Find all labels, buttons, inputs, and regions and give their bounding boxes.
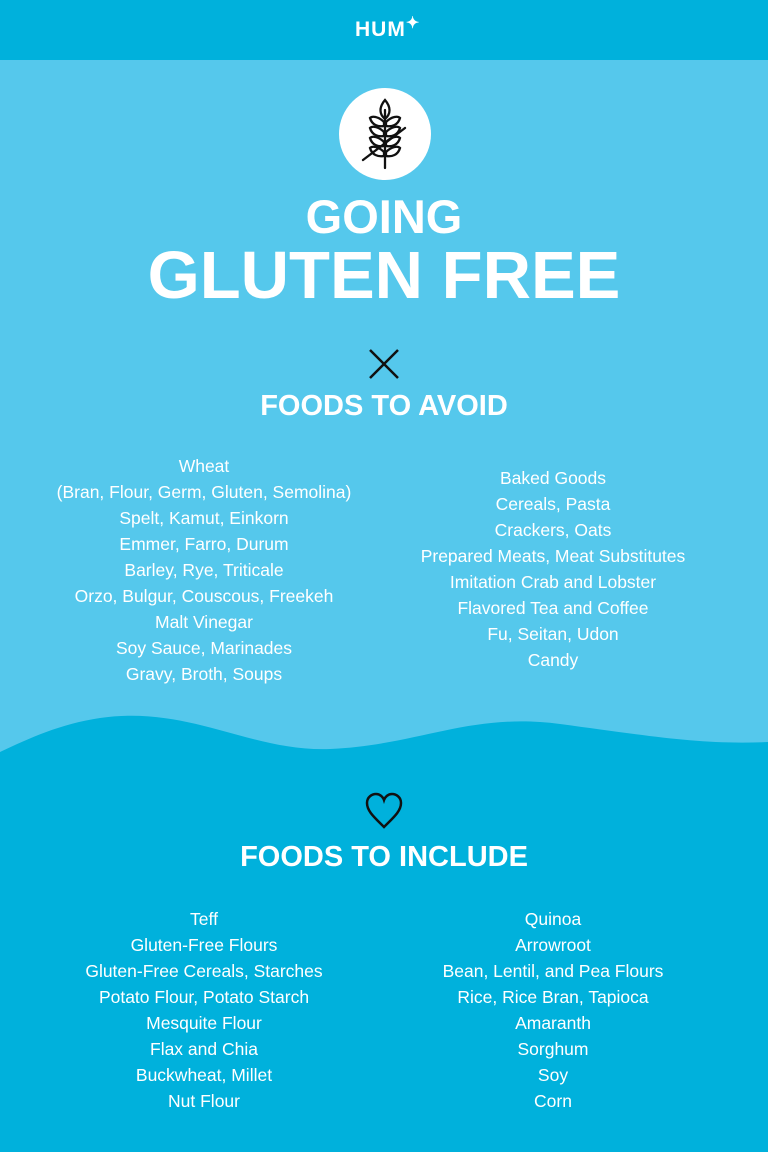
avoid list left: Orzo, Bulgur, Couscous, Freekeh	[75, 586, 333, 606]
heading: foods to include: FOODS TO INCLUDE	[240, 841, 528, 873]
avoid list right: Flavored Tea and Coffee	[457, 598, 648, 618]
include list right: Amaranth	[515, 1013, 591, 1033]
avoid list right: Crackers, Oats	[495, 520, 611, 540]
avoid list left: Malt Vinegar	[155, 612, 253, 632]
include list right	[443, 909, 663, 1111]
avoid list right: Fu, Seitan, Udon	[487, 624, 619, 644]
light background with wave	[0, 60, 768, 752]
include list right: Quinoa	[525, 909, 581, 929]
avoid list left: Soy Sauce, Marinades	[116, 638, 292, 658]
avoid list right: Baked Goods	[500, 468, 606, 488]
avoid list right	[421, 468, 685, 670]
text: GLUTEN FREE	[148, 238, 620, 313]
include list left: Flax and Chia	[150, 1039, 258, 1059]
icon: crossed wheat	[339, 88, 431, 180]
heading: foods to avoid: FOODS TO AVOID	[260, 390, 508, 422]
avoid list left: Barley, Rye, Triticale	[124, 560, 284, 580]
avoid list left: (Bran, Flour, Germ, Gluten, Semolina)	[57, 482, 351, 502]
avoid list left: Wheat	[179, 456, 229, 476]
include list right: Bean, Lentil, and Pea Flours	[443, 961, 663, 981]
include list right: Soy	[538, 1065, 568, 1085]
title: GOING	[306, 190, 462, 243]
include list left: Teff	[190, 909, 218, 929]
avoid list right: Imitation Crab and Lobster	[450, 572, 656, 592]
avoid list right: Candy	[528, 650, 578, 670]
include list left: Mesquite Flour	[146, 1013, 262, 1033]
avoid list left	[57, 456, 351, 684]
avoid list left: Emmer, Farro, Durum	[119, 534, 289, 554]
include list left: Gluten-Free Cereals, Starches	[85, 961, 323, 981]
top bar	[0, 0, 768, 60]
icon: X	[369, 349, 399, 379]
avoid list left: Spelt, Kamut, Einkorn	[119, 508, 289, 528]
include list right: Arrowroot	[515, 935, 591, 955]
avoid list right: Prepared Meats, Meat Substitutes	[421, 546, 685, 566]
logo: HUM✦	[355, 15, 420, 41]
include list right: Sorghum	[517, 1039, 588, 1059]
include list right: Corn	[534, 1091, 572, 1111]
include list left: Potato Flour, Potato Starch	[99, 987, 309, 1007]
include list left: Buckwheat, Millet	[136, 1065, 272, 1085]
avoid list right: Cereals, Pasta	[496, 494, 610, 514]
include list right: Rice, Rice Bran, Tapioca	[457, 987, 649, 1007]
include list left: Nut Flour	[168, 1091, 240, 1111]
include list left	[85, 909, 323, 1111]
avoid list left: Gravy, Broth, Soups	[126, 664, 282, 684]
include list left: Gluten-Free Flours	[131, 935, 277, 955]
icon: heart	[366, 792, 402, 829]
